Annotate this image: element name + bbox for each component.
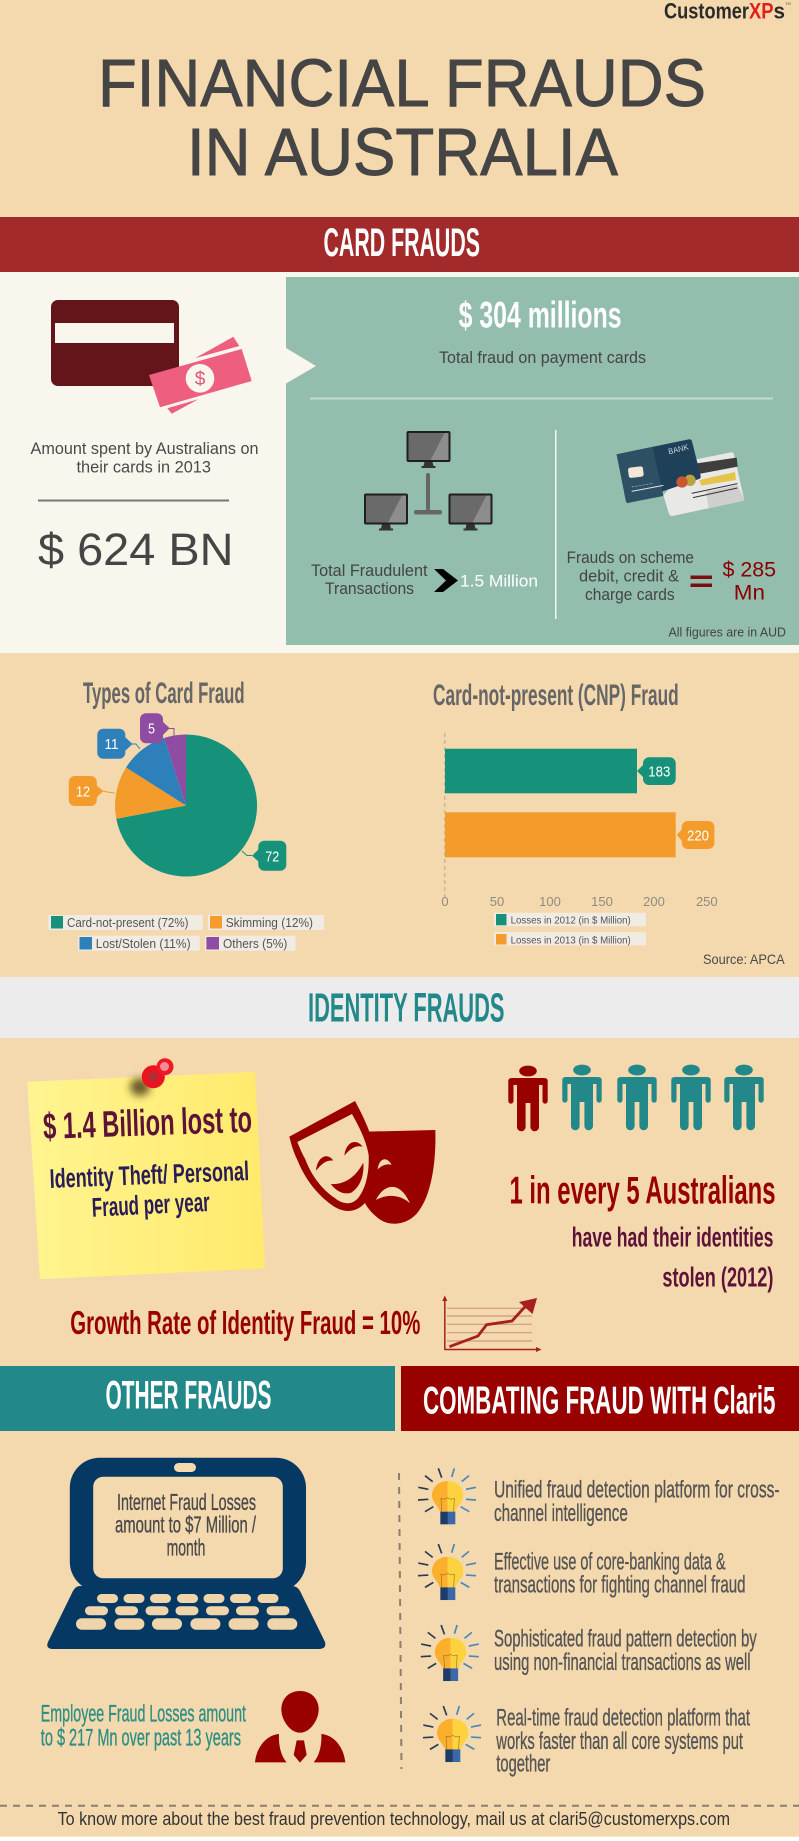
- text: total fraudulent transactions: [311, 561, 428, 598]
- icon: theatre masks: [289, 1101, 435, 1224]
- icon: push pin: [130, 1058, 174, 1096]
- text: employee fraud: to $ 217 Mn over past 13 years: [41, 1725, 241, 1752]
- source note: Source: APCA: [703, 951, 785, 967]
- icon: credit card with money: [51, 300, 252, 414]
- title: [98, 46, 706, 190]
- text: frauds on scheme cards: debit, credit &: [579, 566, 680, 586]
- callout: 12: 12: [76, 784, 90, 800]
- text: frauds on scheme cards: Frauds on scheme: [567, 548, 694, 567]
- section band: card frauds: CARD FRAUDS: [324, 221, 480, 265]
- text: frauds on scheme cards: [567, 548, 694, 604]
- text: fraud pattern detection: [494, 1626, 757, 1676]
- text: total fraudulent transactions: Transactions: [325, 579, 414, 598]
- axis labels: 150: [591, 894, 613, 909]
- section band: other frauds: OTHER FRAUDS: [106, 1373, 272, 1417]
- text: unified fraud detection: [494, 1476, 780, 1527]
- heading: types of card fraud: Types of Card Fraud: [83, 677, 245, 710]
- axis labels: 250: [696, 894, 718, 909]
- icon: laptop with internet fraud text: [47, 1458, 325, 1649]
- value: 285 Mn: [722, 558, 776, 604]
- text: real-time detection: [496, 1705, 750, 1778]
- text: internet fraud losses: amount to $7 Million /: [115, 1512, 256, 1538]
- text: 1.4 billion lost: $ 1.4 Billion lost to: [42, 1099, 253, 1147]
- text: employee fraud: [41, 1701, 246, 1752]
- text: internet fraud losses: month: [167, 1535, 205, 1561]
- text: employee fraud: Employee Fraud Losses amount: [41, 1701, 246, 1728]
- callout: 5: 5: [148, 720, 155, 738]
- bar: 2012: [445, 749, 676, 793]
- pie chart: [69, 713, 286, 876]
- title: IN AUSTRALIA: [187, 115, 618, 190]
- section band: combating fraud: [401, 1366, 799, 1431]
- axis labels: [441, 894, 718, 909]
- icon: bulb 4: [423, 1706, 481, 1762]
- icon: growth chart: [442, 1296, 542, 1352]
- value: 304 millions: $ 304 millions: [459, 294, 622, 336]
- text: amount spent: Amount spent by Australians on: [30, 439, 258, 458]
- footer: To know more about the best fraud prevention technology, mail us at clari5@customerxps.com: [58, 1809, 730, 1829]
- text: internet fraud losses: Internet Fraud Losses: [117, 1489, 256, 1515]
- section band: other frauds: [0, 1366, 395, 1431]
- arrow: chevron: [434, 569, 458, 592]
- icon: person with tie: [255, 1691, 345, 1763]
- axis labels: 0: [441, 894, 449, 909]
- icon: bank cards: BANK: [667, 442, 690, 456]
- text: frauds on scheme cards: charge cards: [585, 585, 675, 604]
- title: FINANCIAL FRAUDS: [98, 46, 706, 121]
- bar: 2013: [445, 812, 714, 857]
- pie legend: Card-not-present (72%): [67, 915, 188, 930]
- value: 285 Mn: Mn: [734, 582, 765, 604]
- logo: TM: [785, 1, 791, 6]
- icon: equals sign: [690, 576, 712, 587]
- pie legend: Others (5%): [223, 936, 287, 951]
- section band: card frauds: [0, 217, 799, 272]
- bar chart: [441, 733, 718, 909]
- value: 624 BN: $ 624 BN: [38, 524, 234, 575]
- text: internet fraud losses: [115, 1489, 256, 1561]
- panel: total fraud on payment cards: [286, 277, 799, 645]
- text: amount spent: [30, 439, 258, 476]
- text: identity theft: Identity Theft/ Personal: [49, 1156, 250, 1194]
- text: core-banking data: [494, 1548, 746, 1598]
- bar legend: [494, 913, 646, 946]
- sticky note: [27, 1058, 265, 1279]
- icon: credit card with money: $: [195, 369, 206, 390]
- axis labels: 50: [490, 894, 504, 909]
- icon: five people: [508, 1065, 764, 1131]
- bar legend: Losses in 2012 (in $ Million): [511, 915, 631, 926]
- icon: bulb 1: [418, 1468, 476, 1524]
- text: amount spent: their cards in 2013: [76, 458, 211, 476]
- icon: bank cards: [617, 439, 744, 516]
- icon: bulb 2: [418, 1544, 476, 1600]
- callout: 72: [242, 841, 286, 871]
- callout: 12: [69, 776, 115, 806]
- axis labels: 100: [539, 894, 561, 909]
- note: all figures in AUD: All figures are in AUD: [668, 624, 786, 640]
- value: 1.5 million: 1.5 Million: [460, 572, 538, 590]
- text: identities stolen: [572, 1222, 774, 1293]
- divider: vertical dashed: [399, 1473, 402, 1769]
- section band: identity frauds: [0, 977, 799, 1038]
- section band: identity frauds: IDENTITY FRAUDS: [308, 985, 504, 1031]
- text: unified fraud detection: channel intelligence: [494, 1500, 628, 1527]
- panel: charts background: [0, 653, 799, 977]
- callout: 11: 11: [104, 736, 118, 753]
- axis labels: 200: [643, 894, 665, 909]
- bar: 2012: 183: [648, 764, 670, 780]
- pie legend: Lost/Stolen (11%): [96, 936, 191, 951]
- text: real-time detection: together: [496, 1751, 550, 1778]
- value: 285 Mn: $ 285: [722, 558, 776, 582]
- bar: 2013: 220: [687, 828, 709, 844]
- pie legend: Skimming (12%): [226, 915, 313, 930]
- text: growth rate: Growth Rate of Identity Fraud = 10%: [70, 1304, 420, 1341]
- footer: [0, 1806, 799, 1841]
- icon: networked monitors: [364, 431, 492, 530]
- icon: bulb 3: [421, 1625, 479, 1681]
- pie legend: [48, 915, 324, 951]
- text: total fraud: Total fraud on payment cards: [439, 348, 646, 367]
- panel: amount spent: [0, 272, 799, 653]
- text: total fraudulent transactions: Total Fraudulent: [311, 561, 428, 580]
- text: identity theft: [49, 1156, 250, 1223]
- bar legend: Losses in 2013 (in $ Million): [511, 935, 631, 946]
- callout: 5: [140, 713, 174, 743]
- callout: 72: 72: [265, 848, 279, 866]
- text: identity theft: Fraud per year: [91, 1187, 211, 1223]
- callout: 11: [97, 729, 140, 759]
